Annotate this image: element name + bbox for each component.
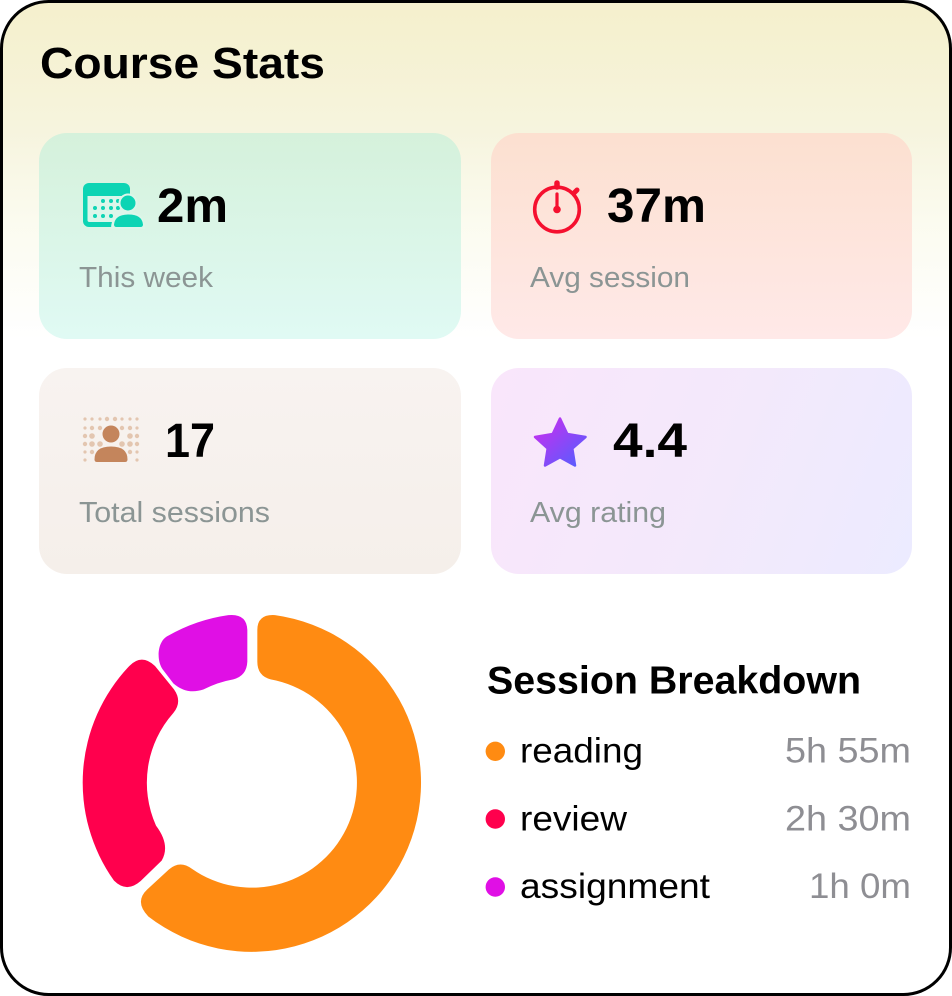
value: average rating: 4.4 <box>613 415 687 468</box>
panel: total sessions <box>39 368 461 574</box>
legend row: reading <box>486 732 911 770</box>
title: Course Stats <box>40 39 325 88</box>
label: total sessions: Total sessions <box>79 497 270 529</box>
legend row: assignment: 1h 0m <box>809 867 911 906</box>
icon: star <box>535 418 586 466</box>
segment: review <box>83 660 178 887</box>
legend row: assignment <box>486 867 911 906</box>
segment: reading <box>141 615 421 952</box>
icon: person with dots <box>83 417 139 462</box>
panel: this week <box>39 133 461 339</box>
label: this week: This week <box>79 262 214 294</box>
label: average rating: Avg rating <box>530 497 666 529</box>
icon: calendar with person <box>83 183 145 229</box>
value: average session: 37m <box>607 180 706 233</box>
legend row: review: review <box>520 800 628 838</box>
donut chart <box>83 615 421 952</box>
legend row: reading: 5h 55m <box>785 732 911 770</box>
legend row: review <box>486 800 911 838</box>
panel: average session <box>491 133 912 339</box>
panel: average rating <box>491 368 912 574</box>
value: this week: 2m <box>157 180 228 233</box>
icon: stopwatch <box>535 183 579 232</box>
heading: session breakdown: Session Breakdown <box>487 660 861 702</box>
legend row: review: 2h 30m <box>785 800 911 838</box>
value: total sessions: 17 <box>165 415 215 468</box>
segment: assignment <box>159 615 247 691</box>
legend row: assignment: assignment <box>520 867 710 906</box>
legend row: reading: reading <box>520 732 643 770</box>
label: average session: Avg session <box>530 262 690 294</box>
